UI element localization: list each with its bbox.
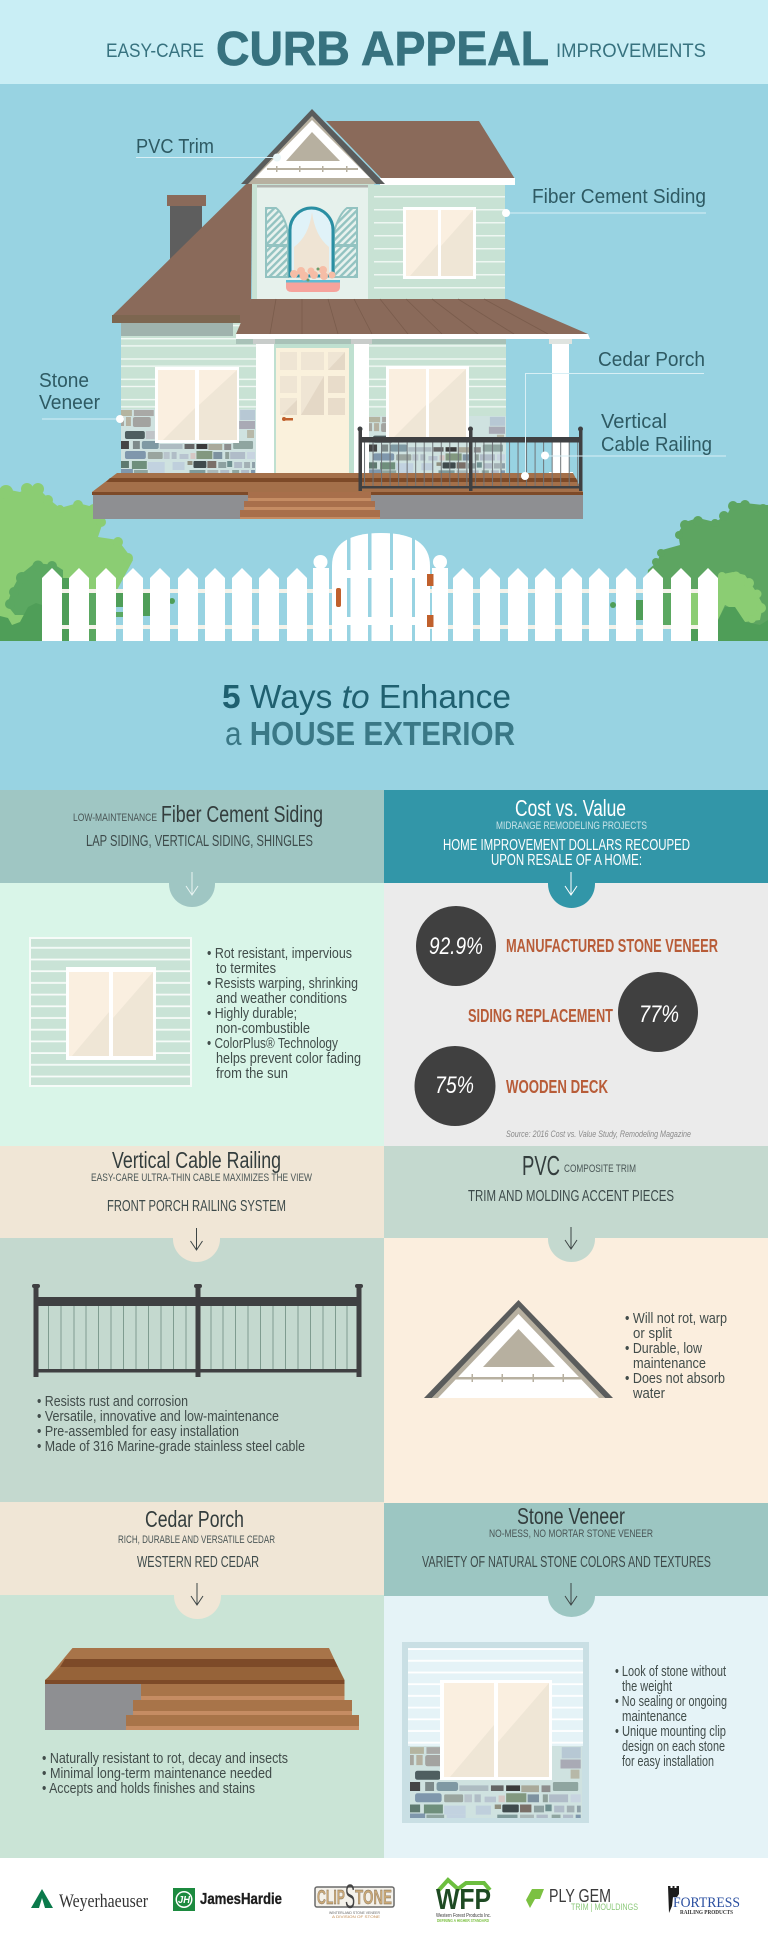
heading (468, 1150, 674, 1205)
heading: Vertical Cable Railing (112, 1147, 281, 1173)
callout: PVC Trim: PVC Trim (136, 136, 214, 158)
bullets: and weather conditions (216, 991, 347, 1007)
callout: Fiber Cement Siding: Fiber Cement Siding (532, 186, 706, 208)
heading: LOW-MAINTENANCE (73, 812, 157, 824)
bullets (207, 946, 361, 1082)
bullets: • Accepts and holds finishes and stains (42, 1781, 255, 1797)
title: CURB APPEAL (216, 23, 549, 76)
heading (73, 801, 323, 850)
dormer wall (252, 178, 374, 299)
bush: right (610, 500, 768, 641)
callout: Vertical Cable Railing: Cable Railing (601, 434, 712, 456)
title (106, 23, 706, 76)
stat: siding replacement (468, 972, 698, 1052)
stat: wooden deck: WOODEN DECK (506, 1077, 608, 1097)
bullets: • Will not rot, warp (625, 1311, 727, 1327)
fence pickets left (42, 568, 307, 641)
logo: WFP: Western Forest Products Inc. (436, 1913, 491, 1919)
siding illustration (30, 938, 191, 1086)
flower box (286, 266, 340, 292)
section heading: 5 Ways to Enhance (222, 678, 511, 715)
panel: cost vs value (384, 790, 768, 1147)
porch railing (358, 426, 583, 491)
heading (422, 1503, 711, 1571)
callout: PVC Trim (136, 136, 281, 162)
cedar deck (92, 473, 583, 495)
callout: Vertical Cable Railing: Vertical (601, 411, 667, 433)
porch roof (236, 299, 590, 344)
lower wall right (368, 340, 506, 473)
arrow (169, 872, 215, 907)
logo: WFP: DEFINING A HIGHER STANDARD (437, 1918, 490, 1923)
heading: WESTERN RED CEDAR (137, 1554, 259, 1571)
arrow (548, 872, 595, 908)
logo: WFP (436, 1880, 491, 1923)
picket fence and gate (42, 533, 718, 641)
logo: James Hardie: JamesHardie (200, 1891, 282, 1908)
arrow (173, 1228, 220, 1262)
heading (118, 1506, 275, 1571)
bullets: or split (633, 1326, 672, 1342)
cedar deck illustration (45, 1648, 359, 1730)
stat: wooden deck: 75% (435, 1072, 474, 1099)
callout: Fiber Cement Siding (502, 186, 706, 217)
stat: siding replacement: 77% (639, 1001, 679, 1028)
bullets: • Pre-assembled for easy installation (37, 1424, 239, 1440)
logo: James Hardie: JH (178, 1895, 191, 1906)
bullets: helps prevent color fading (216, 1051, 361, 1067)
bullets: • Unique mounting clip (615, 1724, 726, 1740)
arrow (174, 1583, 221, 1619)
front steps (240, 492, 380, 519)
stone veneer (121, 409, 506, 473)
bullets: • Highly durable; (207, 1006, 297, 1022)
bullets: from the sun (216, 1066, 288, 1082)
logo: Ply Gem (526, 1886, 638, 1913)
logo: Fortress: FORTRESS (673, 1895, 740, 1911)
panel: fiber cement siding (0, 790, 384, 1147)
heading: FRONT PORCH RAILING SYSTEM (107, 1198, 286, 1215)
sponsor logos strip (0, 1858, 768, 1947)
logo: Clipstone: CLIP (317, 1887, 345, 1909)
logo: Weyerhaeuser: Weyerhaeuser (59, 1891, 149, 1912)
logo: James Hardie (173, 1888, 282, 1911)
PVC gable illustration (424, 1300, 613, 1398)
logo: Fortress: RAILING PRODUCTS (680, 1909, 733, 1916)
bullets: maintenance (622, 1709, 687, 1725)
arched gate (332, 533, 434, 641)
logo: Ply Gem: TRIM | MOULDINGS (571, 1902, 638, 1913)
callout: Stone Veneer: Veneer (39, 392, 100, 414)
heading: COMPOSITE TRIM (564, 1163, 636, 1175)
arched window with shutters (266, 208, 357, 292)
upper wall siding (368, 185, 505, 299)
source: Source: 2016 Cost vs. Value Study, Remodeling Magazine (506, 1129, 691, 1140)
bullets: • Durable, low (625, 1341, 702, 1357)
heading (91, 1147, 312, 1215)
bullets (37, 1394, 305, 1455)
foundation (93, 494, 583, 519)
logo: WFP: WFP (436, 1884, 491, 1916)
bullets: non-combustible (216, 1021, 310, 1037)
gate posts (313, 555, 448, 641)
upper right window (403, 207, 476, 279)
bullets (615, 1664, 727, 1770)
lower wall left (121, 323, 256, 473)
bullets: • No sealing or ongoing (615, 1694, 727, 1710)
heading: Cost vs. Value (515, 795, 626, 821)
bullets: • Rot resistant, impervious (207, 946, 352, 962)
heading: RICH, DURABLE AND VERSATILE CEDAR (118, 1534, 275, 1546)
bullets (42, 1751, 288, 1797)
stone wall illustration (402, 1642, 589, 1823)
stat: siding replacement: SIDING REPLACEMENT (468, 1006, 613, 1026)
left main roof (112, 184, 252, 323)
bullets: to termites (216, 961, 276, 977)
heading: EASY-CARE ULTRA-THIN CABLE MAXIMIZES THE VIEW (91, 1172, 312, 1184)
bullets: for easy installation (622, 1754, 714, 1770)
panel: vertical cable railing (0, 1146, 384, 1502)
logo: Clipstone: TONE (355, 1887, 392, 1909)
heading: TRIM AND MOLDING ACCENT PIECES (468, 1188, 674, 1205)
logo: Ply Gem: PLY GEM (549, 1886, 611, 1906)
heading: UPON RESALE OF A HOME: (491, 852, 642, 869)
panel: PVC (384, 1146, 768, 1503)
heading: MIDRANGE REMODELING PROJECTS (496, 820, 647, 832)
bullets: • Look of stone without (615, 1664, 726, 1680)
heading: NO-MESS, NO MORTAR STONE VENEER (489, 1528, 653, 1540)
logo: Clipstone: WINTERLAND STONE VENEER (329, 1910, 380, 1915)
bullets: maintenance (633, 1356, 706, 1372)
lower left window (155, 367, 239, 443)
logo: Clipstone: S (345, 1878, 355, 1916)
callout: Cedar Porch: Cedar Porch (598, 349, 705, 371)
door (271, 344, 354, 473)
heading: LAP SIDING, VERTICAL SIDING, SHINGLES (86, 833, 313, 850)
logo: Clipstone: A DIVISION OF STONE (332, 1914, 380, 1919)
logo: Clipstone (315, 1878, 394, 1919)
stat: stone veneer (416, 906, 718, 986)
title: IMPROVEMENTS (556, 40, 706, 62)
stat: stone veneer: 92.9% (429, 933, 483, 960)
bullets: the weight (622, 1679, 672, 1695)
bullets (625, 1311, 727, 1402)
bullets: water (632, 1386, 665, 1402)
bush: left (0, 483, 175, 641)
bullets: design on each stone (622, 1739, 725, 1755)
bullets: • Resists warping, shrinking (207, 976, 358, 992)
arrow (548, 1583, 595, 1617)
heading (443, 795, 690, 869)
panel: stone veneer (384, 1503, 768, 1858)
porch columns (253, 339, 573, 479)
bullets: • Minimal long-term maintenance needed (42, 1766, 272, 1782)
bullets: • Naturally resistant to rot, decay and insects (42, 1751, 288, 1767)
bullets: • Does not absorb (625, 1371, 725, 1387)
lower right window (386, 366, 469, 437)
section heading: a HOUSE EXTERIOR (225, 715, 515, 752)
header band (0, 0, 768, 84)
upper roof (326, 121, 515, 179)
heading: PVC (522, 1150, 560, 1181)
fence pickets right (453, 568, 718, 641)
bullets: • Resists rust and corrosion (37, 1394, 188, 1410)
stat: wooden deck (414, 1046, 608, 1126)
bullets: • Versatile, innovative and low-maintenance (37, 1409, 279, 1425)
callout: Cedar Porch (521, 349, 705, 480)
arrow (548, 1227, 595, 1262)
panel: cedar porch (0, 1502, 384, 1858)
sky background (0, 84, 768, 790)
callout: Stone Veneer (39, 370, 124, 423)
heading: Stone Veneer (517, 1503, 625, 1529)
heading: Fiber Cement Siding (161, 801, 323, 827)
bullets: • Made of 316 Marine-grade stainless steel cable (37, 1439, 305, 1455)
logo: Fortress (668, 1886, 740, 1916)
bullets: • ColorPlus® Technology (207, 1036, 339, 1052)
logo: Weyerhaeuser (31, 1889, 149, 1912)
heading: Cedar Porch (145, 1506, 244, 1532)
callout: Vertical Cable Railing (541, 411, 726, 460)
chimney (167, 195, 206, 266)
callout: Stone Veneer: Stone (39, 370, 89, 392)
gable with PVC trim (241, 109, 385, 184)
railing illustration (32, 1284, 363, 1377)
title: EASY-CARE (106, 40, 204, 62)
section heading (222, 678, 515, 752)
house illustration (92, 109, 590, 519)
